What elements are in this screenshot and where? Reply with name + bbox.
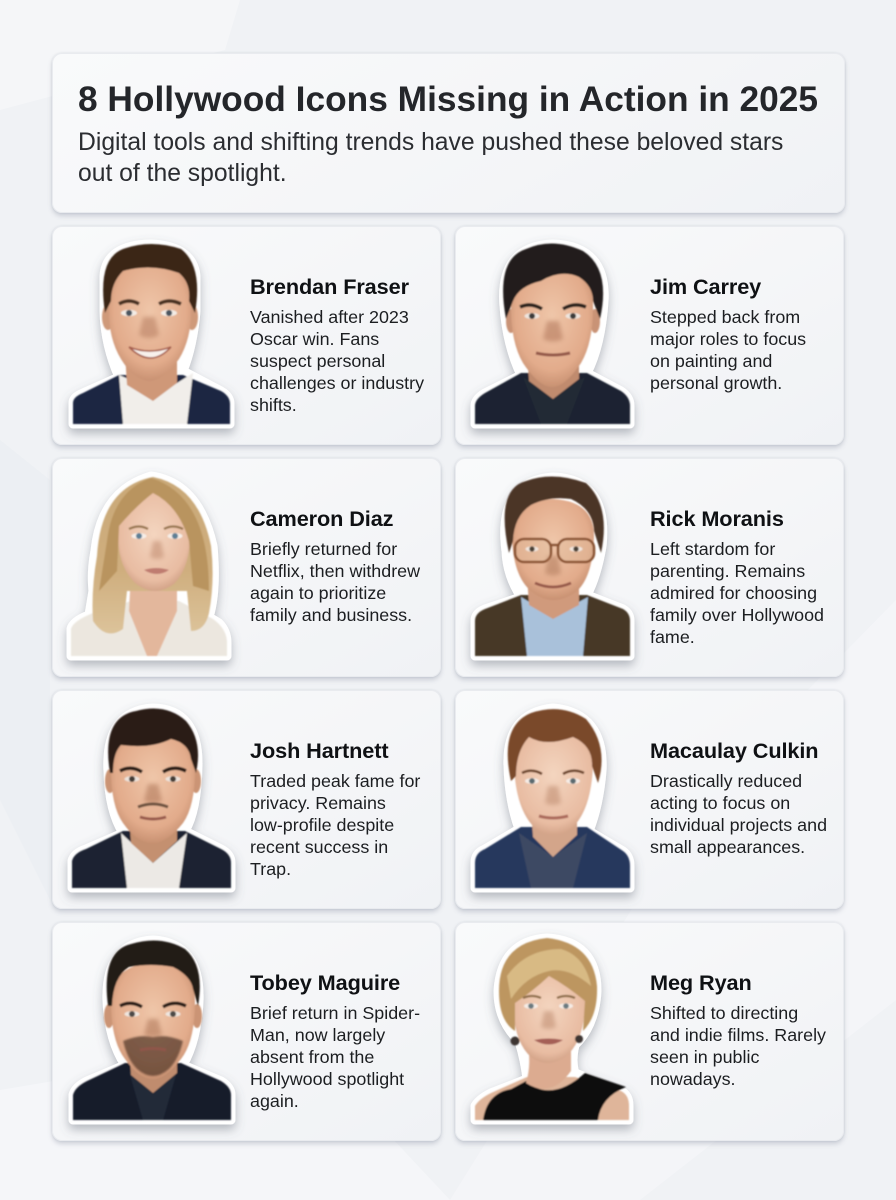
portrait: Josh Hartnett (62, 703, 241, 903)
text: Cameron Diaz: again to prioritize (250, 583, 386, 603)
text: Brendan Fraser: challenges or industry (250, 373, 424, 393)
subtitle (78, 129, 783, 187)
text: Rick Moranis: family over Hollywood (650, 605, 824, 625)
text: Macaulay Culkin (650, 738, 827, 857)
text: Meg Ryan: seen in public (650, 1047, 759, 1067)
panel: Jim Carrey (455, 226, 844, 445)
text: Brendan Fraser: shifts. (250, 395, 297, 415)
text: Josh Hartnett: low-profile despite (250, 815, 394, 835)
text: Jim Carrey (650, 274, 806, 393)
text: Jim Carrey: Stepped back from (650, 307, 800, 327)
text: Meg Ryan: and indie films. Rarely (650, 1025, 826, 1045)
text: Rick Moranis (650, 506, 824, 647)
text: Jim Carrey: Jim Carrey (650, 274, 761, 299)
text: Josh Hartnett: privacy. Remains (250, 793, 386, 813)
portrait: Cameron Diaz (60, 472, 237, 671)
text: Macaulay Culkin: acting to focus on (650, 793, 790, 813)
text: Rick Moranis: admired for choosing (650, 583, 817, 603)
text: Meg Ryan: Shifted to directing (650, 1003, 798, 1023)
subtitle: Digital tools and shifting trends have pushed these beloved stars (78, 129, 783, 156)
text: Tobey Maguire: Brief return in Spider- (250, 1003, 420, 1023)
text: Tobey Maguire: Man, now largely (250, 1025, 385, 1045)
heading: 8 Hollywood Icons Missing in Action in 2025 (78, 80, 818, 119)
text: Meg Ryan: nowadays. (650, 1069, 736, 1089)
panel: Brendan Fraser (52, 226, 441, 445)
text: Brendan Fraser: Vanished after 2023 (250, 307, 409, 327)
text: Brendan Fraser: Oscar win. Fans (250, 329, 379, 349)
panel: Tobey Maguire (52, 922, 441, 1141)
text: Tobey Maguire (250, 970, 420, 1111)
text: Macaulay Culkin: individual projects and (650, 815, 827, 835)
text: Macaulay Culkin: small appearances. (650, 837, 805, 857)
text: Tobey Maguire: Tobey Maguire (250, 970, 400, 995)
text: Macaulay Culkin: Drastically reduced (650, 771, 802, 791)
text: Cameron Diaz: Briefly returned for (250, 539, 397, 559)
text: Tobey Maguire: again. (250, 1091, 299, 1111)
portrait: Brendan Fraser (62, 239, 240, 439)
text: Jim Carrey: major roles to focus (650, 329, 806, 349)
text: Cameron Diaz: Netflix, then withdrew (250, 561, 420, 581)
text: Brendan Fraser: Brendan Fraser (250, 274, 409, 299)
text: Rick Moranis: fame. (650, 627, 695, 647)
text: Macaulay Culkin: Macaulay Culkin (650, 738, 818, 763)
panel: Josh Hartnett (52, 690, 441, 909)
panel: Macaulay Culkin (455, 690, 844, 909)
subtitle: out of the spotlight. (78, 160, 287, 187)
portrait: Tobey Maguire (62, 935, 241, 1135)
text: Josh Hartnett: Traded peak fame for (250, 771, 420, 791)
text: Josh Hartnett: Trap. (250, 859, 291, 879)
text: Brendan Fraser (250, 274, 424, 415)
portrait: Macaulay Culkin (464, 703, 640, 903)
text: Tobey Maguire: Hollywood spotlight (250, 1069, 404, 1089)
text: Rick Moranis: Rick Moranis (650, 506, 784, 531)
text: Josh Hartnett: Josh Hartnett (250, 738, 388, 763)
portrait: Rick Moranis (464, 472, 640, 671)
text: Cameron Diaz: family and business. (250, 605, 412, 625)
panel: Rick Moranis (455, 458, 844, 677)
text: Tobey Maguire: absent from the (250, 1047, 374, 1067)
text: Cameron Diaz: Cameron Diaz (250, 506, 393, 531)
title panel (52, 53, 845, 213)
text: Rick Moranis: Left stardom for (650, 539, 775, 559)
text: Meg Ryan (650, 970, 826, 1089)
text: Josh Hartnett (250, 738, 420, 879)
text: Brendan Fraser: suspect personal (250, 351, 385, 371)
panel: Cameron Diaz (52, 458, 441, 677)
text: Jim Carrey: on painting and (650, 351, 772, 371)
panel: Meg Ryan (455, 922, 844, 1141)
portrait: Jim Carrey (464, 239, 640, 439)
text: Rick Moranis: parenting. Remains (650, 561, 805, 581)
text: Josh Hartnett: recent success in (250, 837, 388, 857)
text: Cameron Diaz (250, 506, 420, 625)
text: Meg Ryan: Meg Ryan (650, 970, 752, 995)
text: Jim Carrey: personal growth. (650, 373, 782, 393)
portrait: Meg Ryan (465, 933, 639, 1135)
